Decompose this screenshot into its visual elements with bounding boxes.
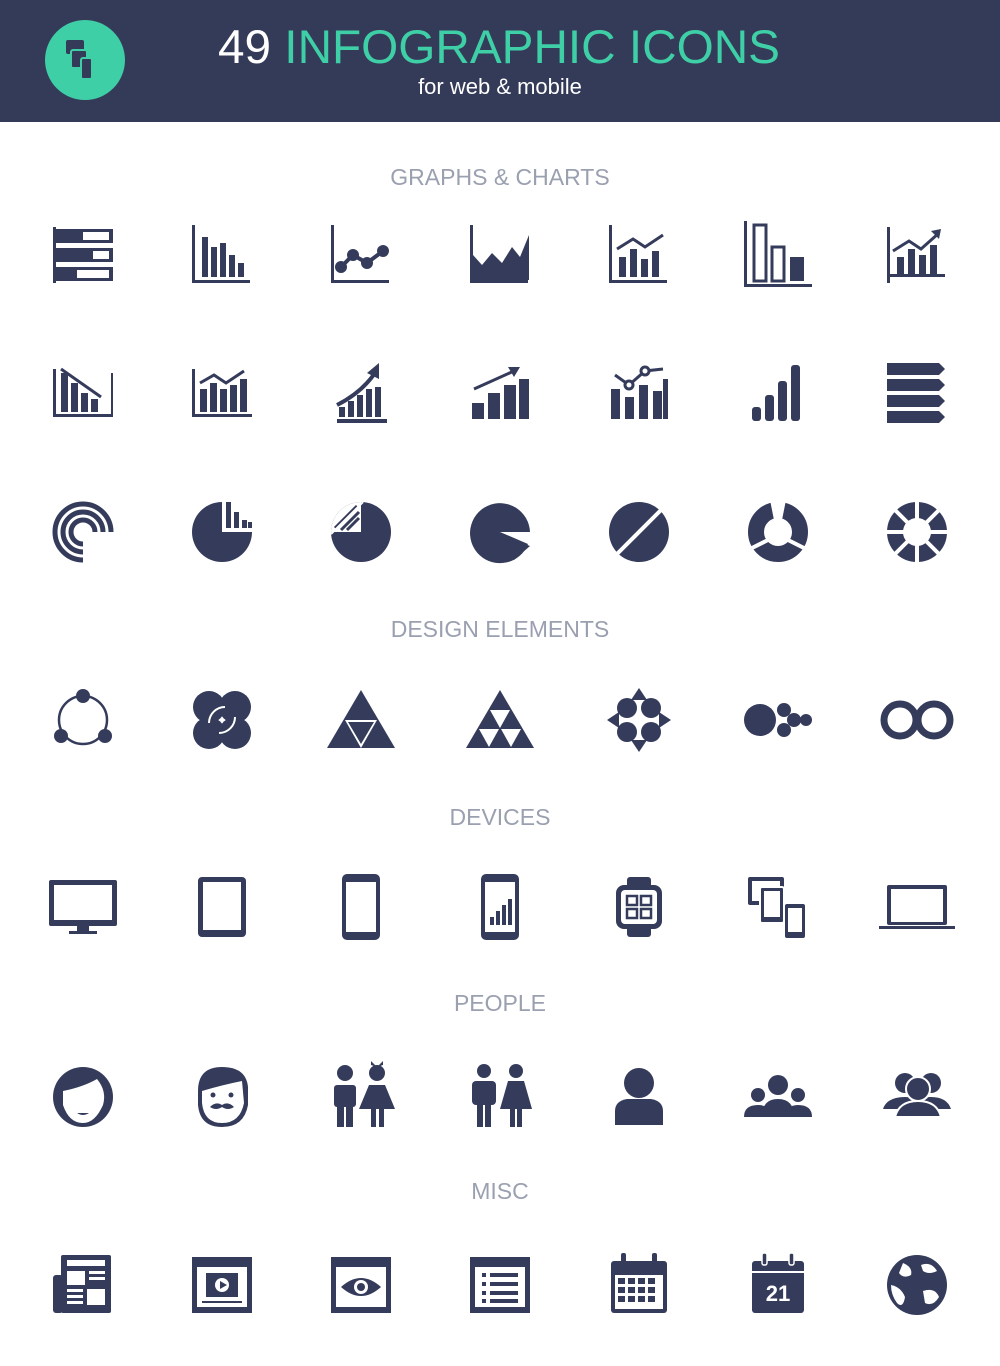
icon: group of people bbox=[744, 1075, 812, 1117]
icon: three outlined bars bbox=[744, 221, 812, 287]
icon: bars with trend bbox=[609, 225, 667, 283]
icon: bars with arrow bbox=[472, 367, 529, 419]
icon: calendar 21: 21 bbox=[766, 1281, 790, 1306]
icon: list browser bbox=[470, 1257, 530, 1313]
icon: multiple devices bbox=[748, 877, 806, 939]
icon: newspaper bbox=[53, 1255, 111, 1313]
icon: globe bbox=[887, 1255, 947, 1315]
heading: misc: MISC bbox=[471, 1178, 529, 1204]
icon: circle cluster bbox=[744, 703, 812, 737]
icon: phone with chart bbox=[481, 874, 519, 940]
icon: steep rising bars bbox=[337, 363, 387, 423]
icon: four-way arrows bbox=[607, 688, 671, 752]
heading: design elements: DESIGN ELEMENTS bbox=[391, 616, 609, 642]
icon: pie with slice bbox=[470, 503, 530, 563]
icon: cycle dots bbox=[54, 689, 112, 744]
icon: arrow bars bbox=[887, 363, 945, 423]
title bbox=[218, 20, 780, 99]
icon: area chart bbox=[470, 225, 529, 283]
icon: four circles bbox=[193, 691, 251, 749]
icon: triangle of 9 bbox=[466, 690, 534, 748]
heading: graphs & charts: GRAPHS & CHARTS bbox=[390, 164, 610, 190]
icon: user pair bbox=[883, 1073, 951, 1117]
icon: growth bars framed bbox=[192, 369, 252, 417]
icon: triangle of 4 bbox=[327, 690, 395, 748]
icon: boy and girl bbox=[334, 1061, 395, 1127]
icon: eye browser bbox=[331, 1257, 391, 1313]
icon: laptop bbox=[879, 885, 955, 929]
icon: tablet bbox=[198, 877, 246, 937]
icon: dotted bar chart bbox=[192, 225, 250, 283]
icon: man and woman bbox=[472, 1064, 532, 1127]
icon: video browser bbox=[192, 1257, 252, 1313]
title: 49 INFOGRAPHIC ICONS bbox=[218, 20, 780, 73]
icon: falling bars bbox=[53, 369, 113, 417]
icon: segmented donut bbox=[885, 500, 949, 564]
icon: woman face bbox=[53, 1067, 113, 1127]
icon: monitor bbox=[49, 880, 117, 934]
icon: pie with bars bbox=[192, 502, 252, 562]
icon: smartwatch bbox=[616, 877, 662, 937]
heading: people: PEOPLE bbox=[454, 990, 546, 1016]
icon: mustache man bbox=[198, 1067, 248, 1127]
icon: horizontal bars bbox=[53, 227, 113, 283]
icon: line chart bbox=[331, 225, 389, 283]
icon: infinity loop bbox=[884, 704, 950, 736]
header banner bbox=[0, 0, 1000, 122]
icon: bars with rising arrow bbox=[887, 227, 945, 283]
icon: split pie bbox=[609, 502, 669, 562]
icon: phone bbox=[342, 874, 380, 940]
icon: bars with dotted line bbox=[611, 367, 668, 419]
logo badge bbox=[45, 20, 125, 100]
icon: calendar grid bbox=[611, 1253, 667, 1313]
heading: devices: DEVICES bbox=[450, 804, 550, 830]
icon: calendar 21 bbox=[752, 1253, 804, 1313]
icon: concentric arcs bbox=[55, 504, 111, 560]
icon: person bbox=[615, 1068, 663, 1125]
icons grid bbox=[49, 221, 955, 1315]
icon: donut bbox=[748, 500, 808, 554]
icon: signal bars bbox=[752, 365, 800, 421]
subtitle: for web & mobile bbox=[418, 74, 582, 99]
icon: striped pie bbox=[331, 502, 391, 562]
